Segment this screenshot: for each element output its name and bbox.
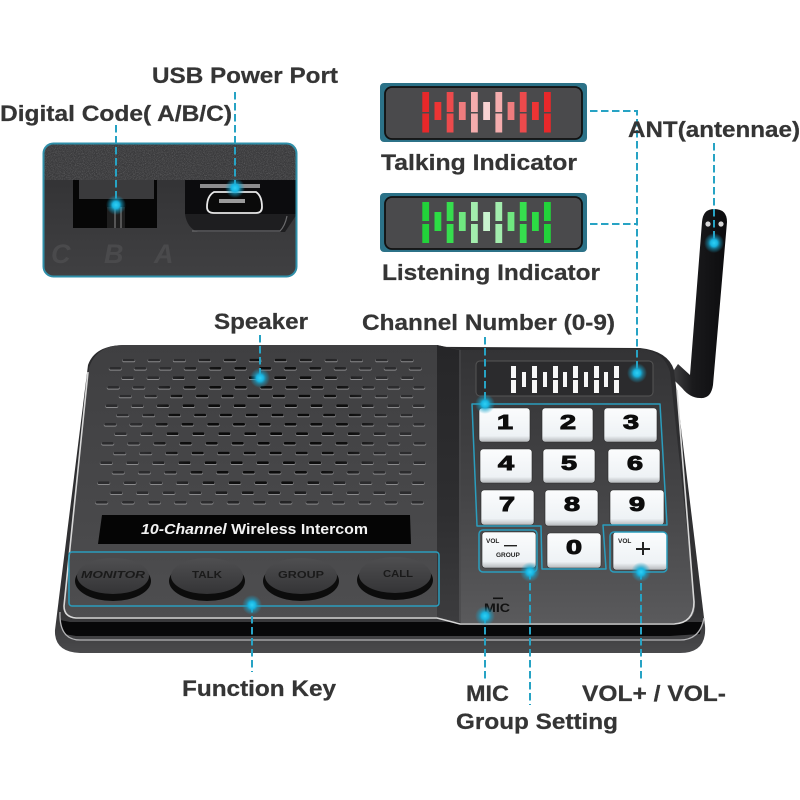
callout dots (106, 178, 724, 626)
function key highlight box (69, 552, 439, 606)
VOL+ key: VOL (618, 538, 631, 545)
keypad: 4 (498, 453, 515, 475)
VOL plus key highlight box (610, 532, 667, 572)
speaker grille (97, 360, 425, 503)
device base (55, 345, 705, 653)
keypad: 8 (564, 494, 580, 516)
label: MIC: MIC (466, 681, 509, 706)
label: ANT antennae: ANT(antennae) (628, 117, 800, 142)
panel: listening indicator (380, 193, 587, 252)
keypad: 3 (623, 412, 639, 434)
keypad (479, 408, 667, 570)
panel: talking indicator (380, 83, 587, 142)
function buttons: MONITOR (81, 570, 146, 581)
right control face (461, 349, 695, 623)
label: VOL+ / VOL-: VOL+ / VOL- (582, 681, 726, 706)
MIC marking: MIC (484, 601, 510, 615)
keypad: 1 (497, 412, 513, 434)
leader lines (116, 92, 714, 705)
antenna (670, 209, 727, 398)
label: Digital Code: Digital Code( A/B/C) (0, 101, 232, 126)
VOL+ key (613, 532, 667, 570)
keypad: 7 (499, 494, 515, 516)
label: Listening Indicator: Listening Indicator (382, 260, 600, 285)
function buttons: GROUP (278, 570, 324, 581)
code letters C B A: B (104, 239, 124, 269)
panel: intercom device body (55, 345, 705, 653)
function buttons (75, 557, 433, 601)
textured top band (43, 143, 297, 180)
label: Talking Indicator: Talking Indicator (381, 150, 577, 175)
channel display window (476, 361, 653, 396)
VOL group key highlight box (479, 530, 537, 572)
label: Channel Number: Channel Number (0-9) (362, 310, 615, 335)
keypad: 5 (561, 453, 577, 475)
code letters C B A (51, 239, 174, 269)
micro USB socket (185, 180, 297, 232)
keypad highlight outline (472, 404, 667, 569)
VOL- / GROUP key: GROUP (496, 552, 520, 559)
digital code switch recess (73, 180, 157, 228)
function buttons: CALL (383, 569, 413, 580)
code letters C B A: C (51, 239, 71, 269)
product label strip (98, 515, 411, 544)
label: USB Power Port: USB Power Port (152, 63, 339, 88)
code letters C B A: A (153, 239, 174, 269)
keypad: 9 (629, 494, 645, 516)
label: Function Key: Function Key (182, 676, 337, 701)
center seam (437, 345, 459, 622)
MIC marking (484, 598, 510, 615)
VOL- / GROUP key (482, 532, 536, 568)
product label strip: 10-Channel Wireless Intercom (141, 522, 368, 538)
function buttons: TALK (192, 570, 223, 581)
panel: USB port and digital code inset photo (43, 143, 297, 277)
left speaker face (64, 345, 461, 623)
keypad: 2 (560, 412, 576, 434)
keypad: 0 (566, 537, 582, 559)
black recess band (60, 620, 702, 636)
lower rim highlight (60, 612, 704, 640)
label: Speaker: Speaker (214, 309, 308, 334)
label: Group Setting: Group Setting (456, 709, 618, 734)
white edge highlight (64, 372, 694, 624)
VOL- / GROUP key: VOL (486, 538, 499, 545)
keypad: 6 (627, 453, 643, 475)
